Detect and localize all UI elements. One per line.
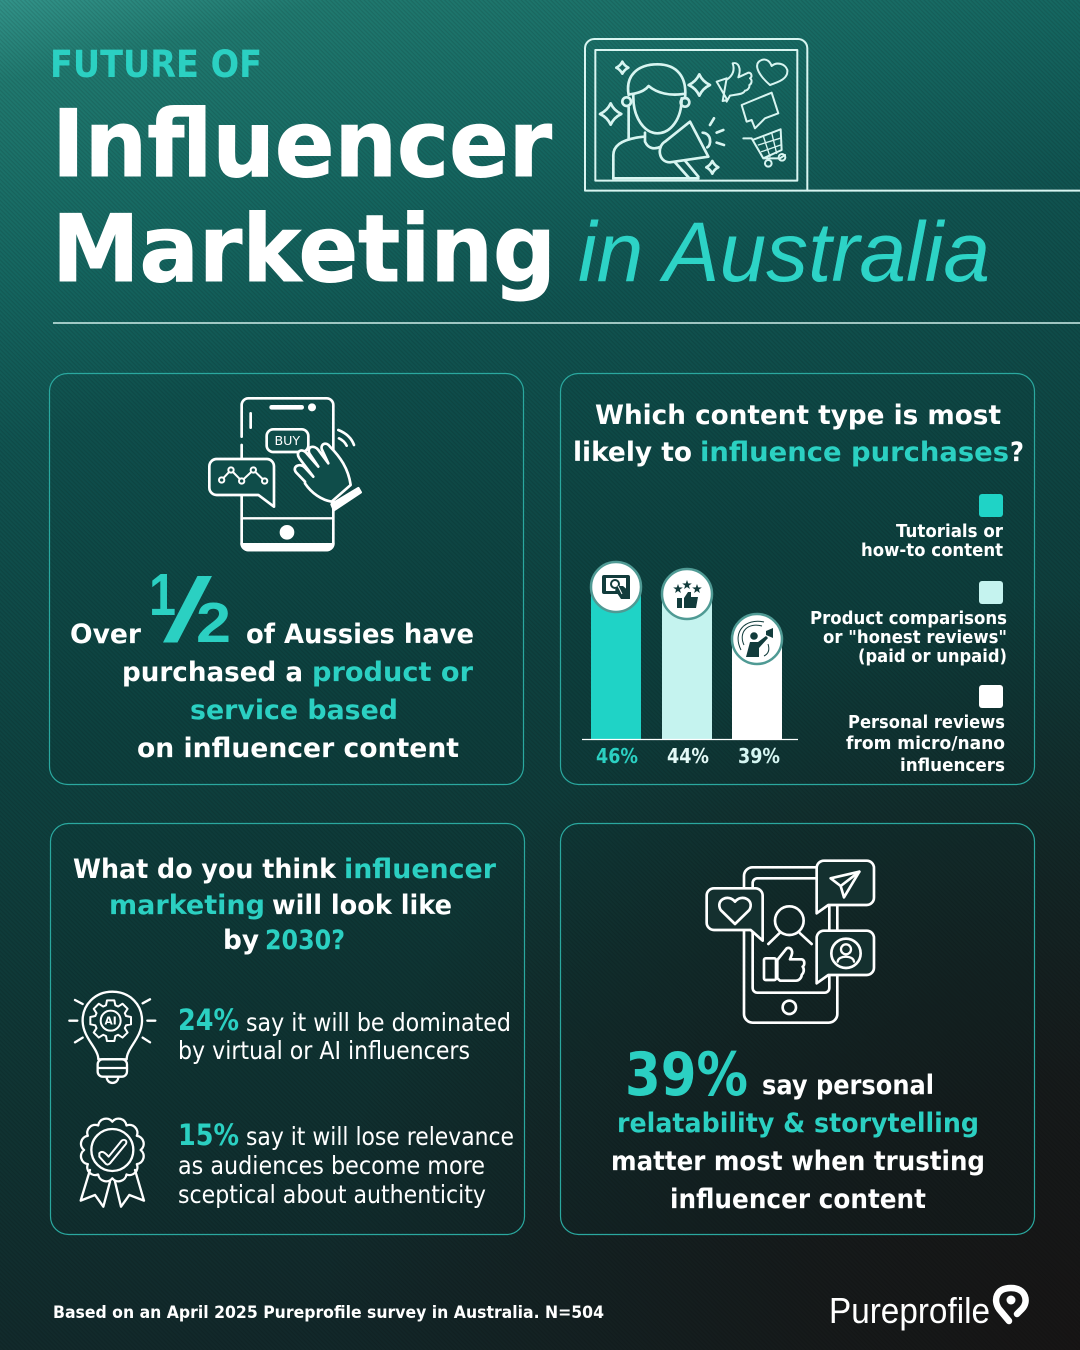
icon: AI light bulb <box>69 992 155 1083</box>
stat: over one half: of Aussies have <box>246 619 474 650</box>
text: purchase statement: purchased a <box>122 657 303 688</box>
heading: content type question: influence purchases <box>700 437 1009 468</box>
legend item: personal reviews: influencers <box>900 755 1005 776</box>
legend item: tutorials: Tutorials or <box>896 521 1003 542</box>
heading: content type question: likely to <box>573 437 692 468</box>
heading: 2030 question <box>73 854 497 956</box>
stat: 39 percent: say personal <box>762 1070 934 1101</box>
text: purchase statement: service based <box>190 695 398 726</box>
stat: 39 percent <box>625 1040 934 1110</box>
bar chart <box>582 562 798 768</box>
stat: 24 percent AI influencers <box>178 1003 511 1065</box>
heading: influencer: Influencer <box>52 90 552 198</box>
icon: AI light bulb: AI <box>105 1015 117 1028</box>
stat: over one half: 2 <box>196 591 231 655</box>
stat: over one half: Over <box>70 619 142 650</box>
stat: 15 percent lose relevance: say it will lose relevance <box>246 1122 514 1151</box>
heading: 2030 question: will look like <box>272 890 452 921</box>
stat: 24 percent AI influencers: by virtual or AI influencers <box>178 1036 470 1065</box>
icon: phone with buy button: BUY <box>274 433 300 448</box>
header rule <box>53 322 1080 324</box>
legend item: product comparisons: or "honest reviews" <box>823 627 1007 648</box>
bar: tutorials 46% <box>591 562 641 739</box>
heading: 2030 question: What do you think <box>73 854 337 885</box>
stat: 24 percent AI influencers: say it will be dominated <box>246 1008 511 1037</box>
text: relatability statement: matter most when trusting <box>611 1146 985 1177</box>
panel: relatability and storytelling <box>560 824 1034 1234</box>
heading: 2030 question: marketing <box>109 890 265 921</box>
legend item: product comparisons: (paid or unpaid) <box>858 646 1007 667</box>
icon: rosette badge <box>81 1119 144 1207</box>
stat: 39 percent: 39% <box>625 1040 748 1110</box>
legend item: tutorials <box>861 494 1003 561</box>
logo: pureprofile: Pureprofile <box>829 1290 990 1331</box>
title block <box>50 43 990 303</box>
stat: 15 percent lose relevance <box>178 1118 514 1209</box>
stat: 24 percent AI influencers: 24% <box>178 1003 239 1037</box>
heading: 2030 question: 2030? <box>265 925 345 956</box>
stat: 15 percent lose relevance: 15% <box>178 1118 239 1152</box>
legend item: tutorials: how-to content <box>861 540 1003 561</box>
heading: 2030 question: influencer <box>344 854 497 885</box>
panel: content type chart <box>560 374 1034 784</box>
icon: phone with social bubbles <box>707 861 874 1023</box>
stat: 15 percent lose relevance: sceptical about authenticity <box>178 1180 486 1209</box>
bar: product comparisons 44% <box>662 569 712 739</box>
panel: one half of Aussies <box>50 374 524 784</box>
text: purchase statement <box>122 657 474 764</box>
stat: over one half <box>70 561 474 655</box>
legend item: personal reviews: Personal reviews <box>848 712 1005 733</box>
value labels: 39% <box>738 744 780 768</box>
stat: over one half: / <box>163 561 213 655</box>
icon: laptop with influencer <box>585 39 1080 191</box>
text: relatability statement <box>611 1108 985 1215</box>
heading: in australia: in Australia <box>578 205 990 299</box>
footer source note: Based on an April 2025 Pureprofile survey in Australia. N=504 <box>53 1303 604 1323</box>
value labels <box>596 744 780 768</box>
text: purchase statement: product or <box>312 657 474 688</box>
stat: over one half: 1 <box>149 562 176 628</box>
text: relatability statement: relatability & storytelling <box>617 1108 979 1139</box>
text: relatability statement: influencer content <box>670 1184 926 1215</box>
icon: phone with buy button <box>209 398 361 550</box>
legend item: product comparisons: Product comparisons <box>810 608 1007 629</box>
heading: content type question <box>573 400 1024 468</box>
legend item: product comparisons <box>810 581 1007 667</box>
panel: 2030 outlook <box>50 824 524 1234</box>
kicker: future of: FUTURE OF <box>50 43 262 86</box>
stat: 15 percent lose relevance: as audiences become more <box>178 1151 485 1180</box>
value labels: 46% <box>596 744 638 768</box>
legend item: personal reviews <box>846 685 1005 776</box>
legend <box>810 494 1007 776</box>
bar: personal reviews 39% <box>732 614 782 739</box>
legend item: personal reviews: from micro/nano <box>846 733 1005 754</box>
heading: 2030 question: by <box>223 925 259 956</box>
heading: marketing: Marketing <box>52 195 556 303</box>
heading: content type question: ? <box>1010 437 1024 468</box>
value labels: 44% <box>667 744 709 768</box>
heading: content type question: Which content type is most <box>595 400 1001 431</box>
text: purchase statement: on influencer content <box>137 733 459 764</box>
